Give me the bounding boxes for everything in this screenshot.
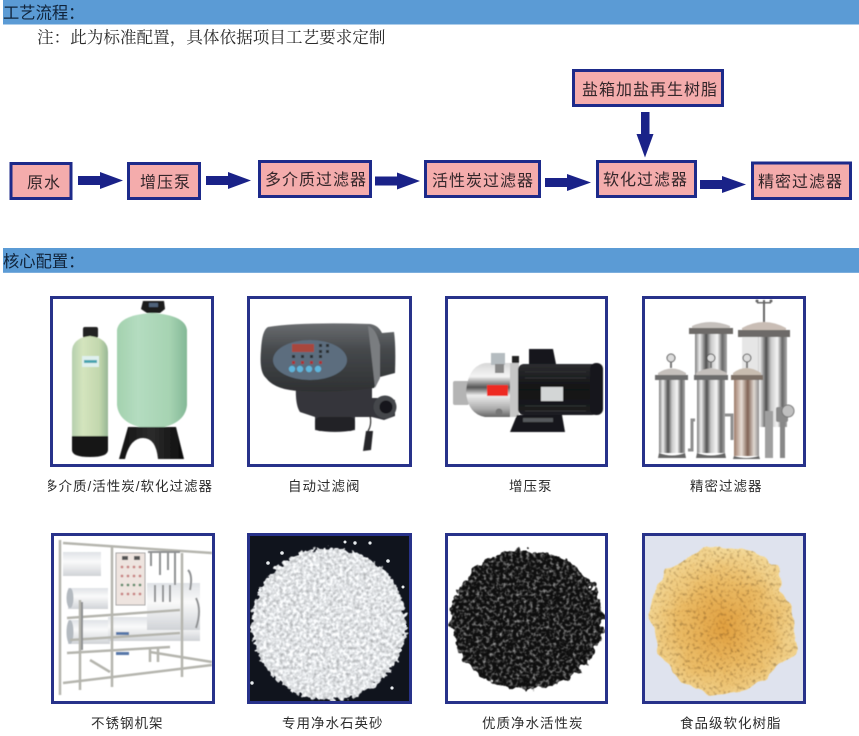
- frame: [446, 298, 606, 466]
- panel: booster pump: [446, 298, 606, 494]
- photo: amber softening resin on pale background: [645, 536, 804, 701]
- photo: small and large fibreglass tanks: [72, 301, 187, 459]
- arrow: brine tank down to softening filter: [636, 112, 654, 158]
- caption: 不锈钢机架: [91, 716, 164, 731]
- section header: core configuration: [3, 248, 859, 273]
- caption: 专用净水石英砂: [282, 715, 384, 731]
- photo: stainless steel rack with membrane vessels: [60, 540, 212, 695]
- frame: [644, 298, 804, 466]
- frame: [248, 298, 410, 466]
- step: brine tank: [574, 70, 722, 106]
- photo: white quartz sand on dark background: [249, 535, 410, 702]
- step: multimedia filter: 多介质过滤器: [265, 171, 367, 189]
- frame: [248, 534, 410, 702]
- step: softening filter: 软化过滤器: [603, 171, 688, 189]
- photo: control valve: [261, 323, 396, 451]
- photo: stainless cartridge filters: [655, 300, 794, 459]
- arrow: raw water to booster pump: [78, 172, 123, 189]
- frame: [446, 534, 606, 702]
- arrow: booster pump to multimedia filter: [206, 172, 251, 189]
- step: raw water: 原水: [27, 174, 61, 192]
- caption: 精密过滤器: [690, 478, 762, 494]
- section header: process flow: [3, 0, 859, 24]
- arrow: multimedia filter to carbon filter: [375, 172, 420, 190]
- arrow: carbon filter to softening filter: [545, 174, 591, 191]
- frame: [52, 534, 214, 702]
- frame: [52, 298, 212, 466]
- panel: softening resin: [644, 534, 804, 731]
- panel: quartz sand: [248, 534, 410, 731]
- step: precision filter: 精密过滤器: [758, 173, 843, 191]
- panel: activated carbon: [446, 534, 606, 731]
- step: activated carbon filter: 活性炭过滤器: [432, 172, 534, 190]
- panel: stainless steel frame: [52, 534, 214, 731]
- step: softening filter: [598, 162, 696, 196]
- panel: automatic valve: [248, 298, 410, 494]
- caption: 多介质/活性炭/软化过滤器: [44, 478, 213, 494]
- flow chart: [11, 70, 850, 198]
- panel: precision filter: [644, 298, 804, 494]
- caption: 优质净水活性炭: [482, 716, 584, 731]
- panel: filter tanks: [44, 298, 213, 494]
- step: activated carbon filter: [426, 162, 540, 196]
- step: precision filter: [752, 163, 850, 198]
- section header: process flow: 工艺流程：: [3, 4, 84, 22]
- step: brine tank: 盐箱加盐再生树脂: [582, 81, 718, 99]
- caption: 食品级软化树脂: [680, 715, 782, 731]
- step: multimedia filter: [260, 162, 370, 196]
- step: raw water: [11, 164, 71, 198]
- frame: [644, 534, 804, 702]
- step: booster pump: [128, 164, 200, 198]
- section header: core configuration: 核心配置：: [3, 253, 84, 271]
- caption: 增压泵: [509, 479, 552, 494]
- photo: black activated carbon granules: [451, 550, 603, 690]
- arrow: softening filter to precision filter: [700, 176, 746, 193]
- step: booster pump: 增压泵: [140, 174, 191, 192]
- note text: 注：此为标准配置，具体依据项目工艺要求定制: [37, 28, 385, 47]
- caption: 自动过滤阀: [288, 479, 360, 494]
- photo: centrifugal pump: [453, 349, 603, 432]
